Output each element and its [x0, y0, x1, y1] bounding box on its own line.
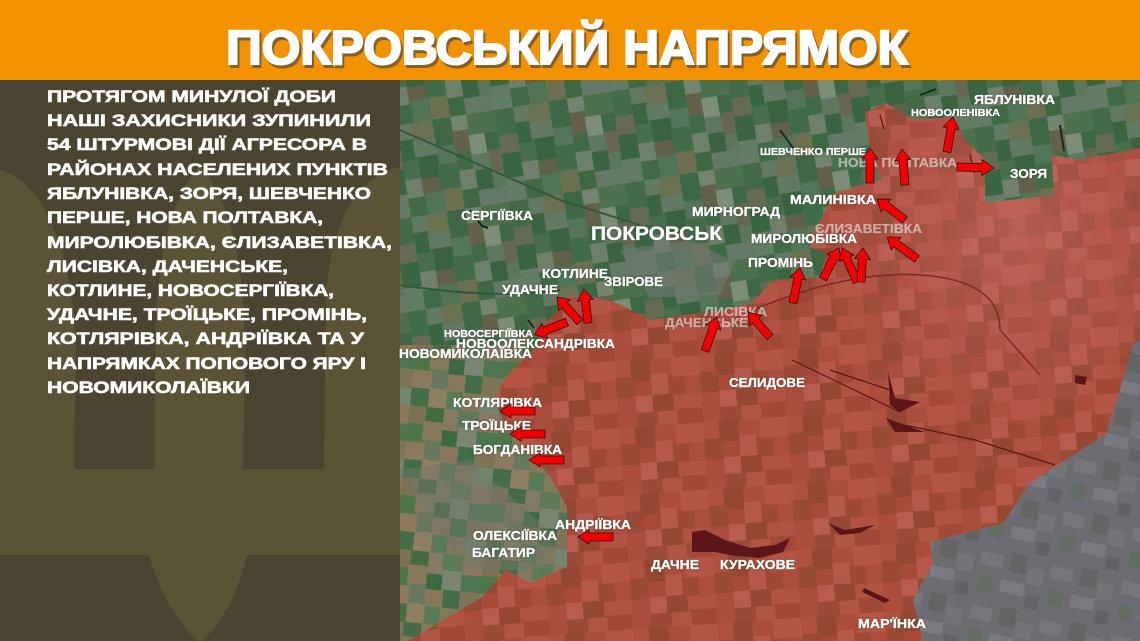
occupied territory [408, 103, 1140, 641]
settlement labels: СЕРГІЇВКА [461, 208, 533, 223]
settlement labels: МИРНОГРАД [692, 204, 781, 219]
settlement labels: НОВОСЕРГІЇВКА [444, 327, 533, 340]
settlement labels: ДАЧЕНСЬКЕ [665, 315, 748, 330]
summary text: КОТЛИНЕ, НОВОСЕРГІЇВКА, [47, 282, 334, 300]
settlement labels: БАГАТИР [472, 545, 535, 560]
settlement labels: ДАЧНЕ [651, 557, 699, 572]
settlement labels: КОТЛИНЕ [542, 266, 608, 281]
settlement labels: НОВООЛЕКСАНДРІВКА [456, 336, 616, 351]
panel: map [399, 80, 1140, 641]
summary text: ЯБЛУНІВКА, ЗОРЯ, ШЕВЧЕНКО [47, 185, 371, 203]
panel: left summary [0, 80, 400, 641]
attack arrows [500, 116, 994, 544]
summary text: УДАЧНЕ, ТРОЇЦЬКЕ, ПРОМІНЬ, [47, 306, 367, 324]
settlement labels: БОГДАНІВКА [473, 442, 563, 457]
settlement labels: ТРОЇЦЬКЕ [462, 418, 531, 433]
icon: trident watermark [0, 80, 400, 641]
settlement labels: ЯБЛУНІВКА [974, 92, 1056, 107]
settlement labels: АНДРІЇВКА [555, 517, 632, 532]
rivers and reservoirs [692, 115, 1087, 603]
settlement labels: МАЛИНІВКА [790, 192, 877, 207]
summary text: 54 ШТУРМОВІ ДІЇ АГРЕСОРА В [47, 136, 367, 154]
settlement labels: ПОКРОВСЬК [591, 224, 722, 245]
settlement labels: ЗВІРОВЕ [604, 274, 663, 289]
settlement labels: КОТЛЯРІВКА [453, 395, 543, 410]
summary text: РАЙОНАХ НАСЕЛЕНИХ ПУНКТІВ [47, 160, 388, 179]
settlement labels: УДАЧНЕ [502, 283, 558, 297]
settlement labels: СЕЛИДОВЕ [729, 375, 805, 390]
panel background [0, 80, 400, 641]
settlement labels: НОВА ПОЛТАВКА [838, 155, 958, 170]
satellite base [400, 80, 1140, 641]
settlement labels: МАР'ЇНКА [858, 616, 927, 631]
settlement labels: НОВОМИКОЛАЇВКА [399, 346, 533, 361]
settlement labels: ОЛЕКСІЇВКА [473, 528, 558, 543]
settlement labels: ШЕВЧЕНКО ПЕРШЕ [760, 146, 866, 158]
settlement labels: ЄЛИЗАВЕТІВКА [815, 221, 923, 236]
summary text: НОВОМИКОЛАЇВКИ [47, 379, 250, 397]
summary text: КОТЛЯРІВКА, АНДРІЇВКА ТА У [47, 330, 365, 348]
header bar [0, 0, 1140, 80]
summary text: НАШІ ЗАХИСНИКИ ЗУПИНИЛИ [47, 112, 371, 130]
summary text: ПРОТЯГОМ МИНУЛОЇ ДОБИ [47, 88, 336, 106]
summary text: ПЕРШЕ, НОВА ПОЛТАВКА, [47, 209, 323, 227]
settlement labels: МИРОЛЮБІВКА [751, 231, 858, 246]
settlement labels: ЛИСІВКА [704, 304, 768, 319]
title: ПОКРОВСЬКИЙ НАПРЯМОК [226, 20, 909, 75]
settlement labels: НОВООЛЕНІВКА [911, 107, 1000, 119]
summary text: МИРОЛЮБІВКА, ЄЛИЗАВЕТІВКА, [47, 234, 392, 252]
summary text [47, 88, 392, 397]
settlement labels: ЗОРЯ [1010, 166, 1047, 181]
settlement labels: КУРАХОВЕ [720, 557, 795, 572]
settlement labels [399, 92, 1056, 631]
settlement labels: ПРОМІНЬ [748, 255, 813, 270]
summary text: ЛИСІВКА, ДАЧЕНСЬКЕ, [47, 258, 288, 276]
summary text: НАПРЯМКАХ ПОПОВОГО ЯРУ І [47, 355, 366, 373]
